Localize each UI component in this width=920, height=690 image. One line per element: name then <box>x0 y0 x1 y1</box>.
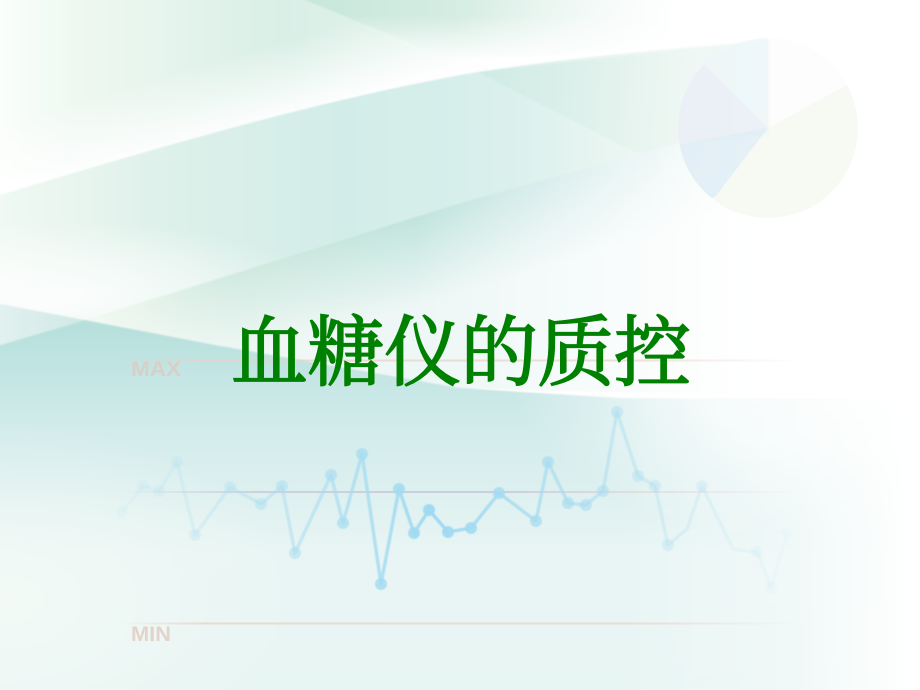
label: MIN: MIN <box>131 623 171 646</box>
pie chart watermark <box>680 38 858 218</box>
title: 血糖仪的质控 <box>231 310 691 396</box>
label: MAX: MAX <box>131 358 181 381</box>
chart rule: MIN line <box>120 622 800 624</box>
line chart with data points <box>116 406 793 593</box>
chart rule: mean line <box>120 491 800 493</box>
chart rule: MAX line <box>120 360 800 362</box>
